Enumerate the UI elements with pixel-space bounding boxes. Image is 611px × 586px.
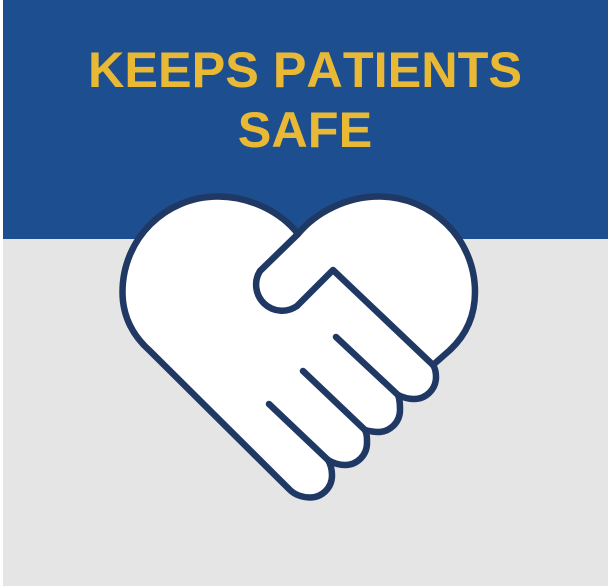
title <box>88 41 522 158</box>
thumb and upper hand outline <box>256 234 433 365</box>
heart hand silhouette <box>122 196 475 498</box>
finger separator 1 <box>269 404 328 460</box>
finger separator 3 <box>336 337 398 395</box>
icon: heart-shaped handshake <box>122 196 475 498</box>
background: upper blue banner <box>3 0 608 239</box>
background: lower grey panel <box>3 239 608 586</box>
title: SAFE <box>238 101 372 158</box>
title: KEEPS PATIENTS <box>88 41 522 98</box>
finger separator 2 <box>303 371 365 430</box>
